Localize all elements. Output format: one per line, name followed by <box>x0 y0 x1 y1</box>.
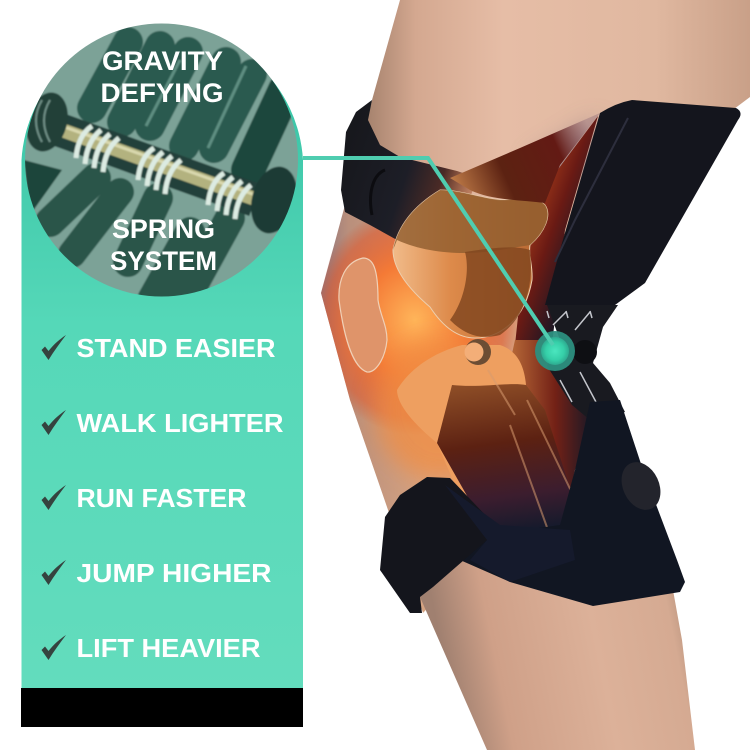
upper rubber pads <box>92 42 285 170</box>
end caps <box>27 92 68 152</box>
lower brace <box>460 400 685 606</box>
bottom strap <box>380 477 490 613</box>
benefit: stand easier: STAND EASIER <box>76 333 276 363</box>
callout line <box>303 158 553 345</box>
strap to brace overlap <box>445 485 575 582</box>
spring mechanism <box>547 305 625 420</box>
circle heading: GRAVITY <box>102 46 223 76</box>
top strap <box>341 100 478 252</box>
femur <box>393 190 548 338</box>
kneecap <box>339 258 387 372</box>
circle heading <box>100 46 224 276</box>
knee heat glow <box>321 222 518 486</box>
benefit: lift heavier: LIFT HEAVIER <box>76 633 261 663</box>
calf skin <box>420 555 695 750</box>
upper brace panel <box>545 100 741 305</box>
circle heading: SYSTEM <box>110 246 217 276</box>
tibia side fill <box>480 340 592 540</box>
axle backing <box>60 130 255 200</box>
brace button <box>614 456 668 516</box>
circle heading: DEFYING <box>100 78 224 108</box>
pad highlights <box>146 60 246 148</box>
lower rubber pads <box>50 178 230 300</box>
upper brace seam <box>555 118 628 262</box>
spring photo circle <box>20 20 304 300</box>
knee and leg illustration <box>310 0 750 750</box>
tibia shade <box>437 384 585 545</box>
springs <box>76 126 251 219</box>
red heat band <box>515 116 598 345</box>
thigh skin <box>345 0 750 300</box>
benefit: jump higher: JUMP HIGHER <box>76 558 272 588</box>
femur shaft dark <box>450 113 600 203</box>
knee skin <box>321 205 540 613</box>
panel background <box>22 27 303 688</box>
femur upper shade <box>393 190 548 253</box>
benefit: run faster: RUN FASTER <box>76 483 247 513</box>
panel: benefits <box>20 20 304 727</box>
femur lower shade <box>450 247 531 337</box>
skin fade near brace <box>530 118 600 200</box>
callout dot <box>535 331 575 371</box>
joint pin <box>464 339 491 365</box>
circle heading: SPRING <box>112 214 215 244</box>
strap fold <box>371 170 385 215</box>
black footer bar <box>21 688 303 727</box>
tibia <box>397 345 526 520</box>
axle <box>56 128 258 200</box>
tibia strut lines <box>488 370 590 530</box>
benefit: walk lighter: WALK LIGHTER <box>76 408 284 438</box>
